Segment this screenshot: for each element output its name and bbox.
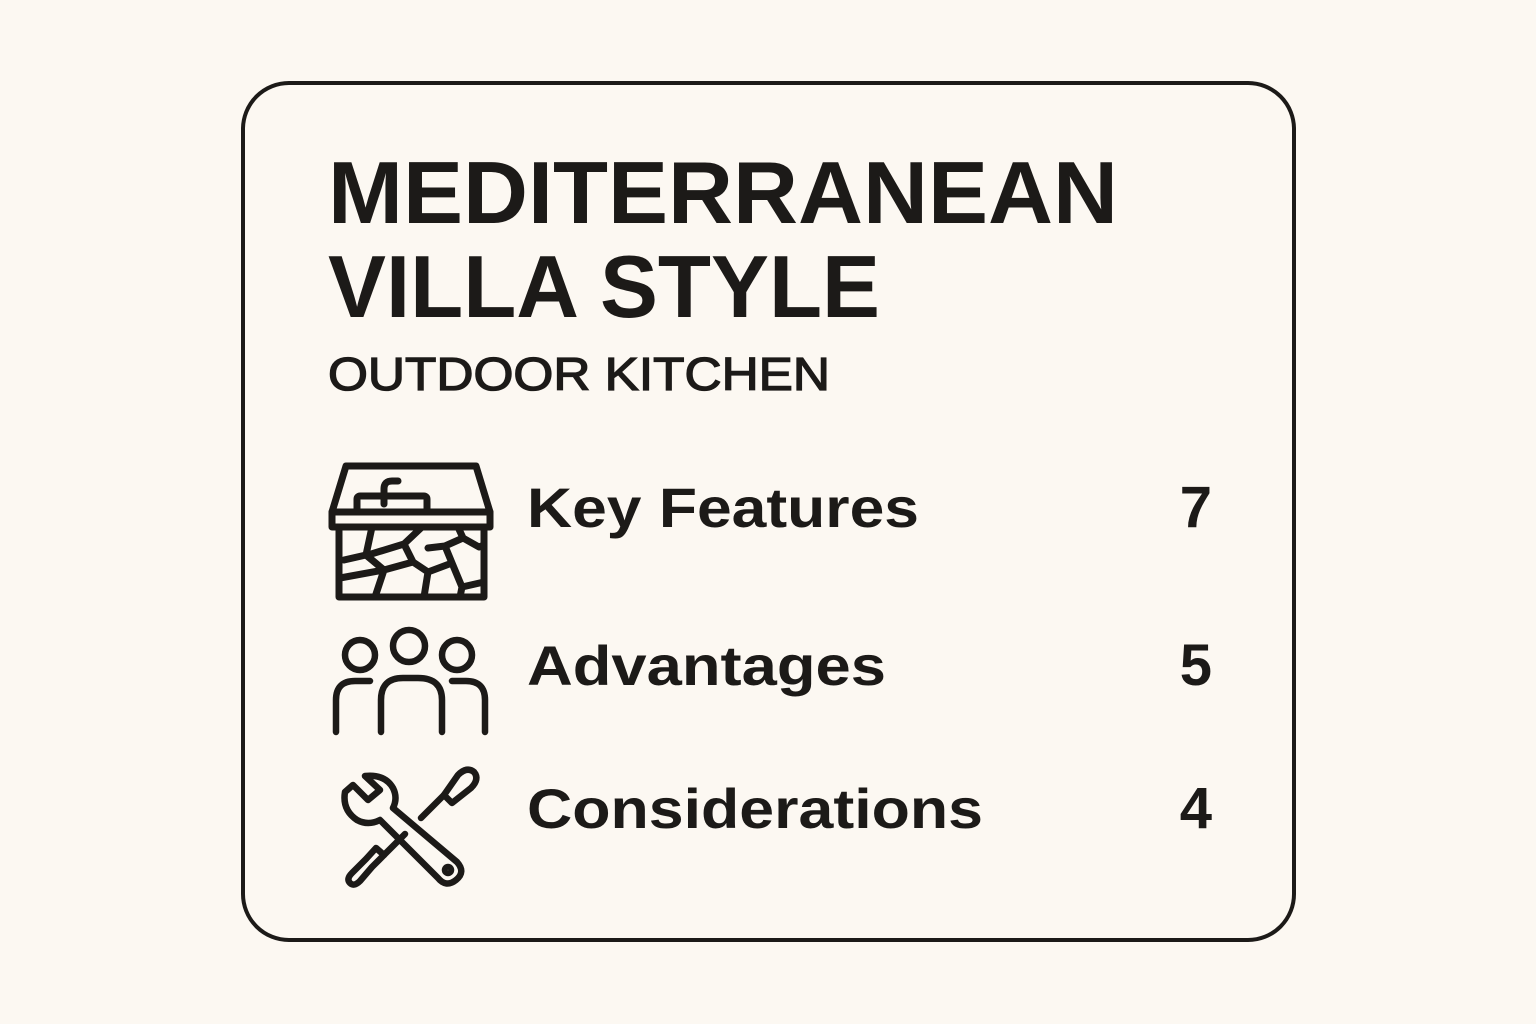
title: MEDITERRANEAN [328,143,1118,242]
icon: people [336,630,485,732]
row: considerations [527,776,1212,841]
row: key features [527,475,1212,540]
row: advantages: 5 [1180,633,1212,698]
row: advantages: Advantages [527,634,886,697]
title: VILLA STYLE [328,237,880,336]
row: advantages [527,633,1212,698]
row: key features: 7 [1180,475,1212,540]
icon: outdoor kitchen [332,466,490,597]
row: considerations: Considerations [527,777,983,840]
row: key features: Key Features [527,476,919,539]
panel: main card [243,83,1294,940]
subtitle: OUTDOOR KITCHEN [328,348,830,400]
icon: tools [344,770,476,885]
row: considerations: 4 [1180,776,1212,841]
title [328,143,1118,336]
